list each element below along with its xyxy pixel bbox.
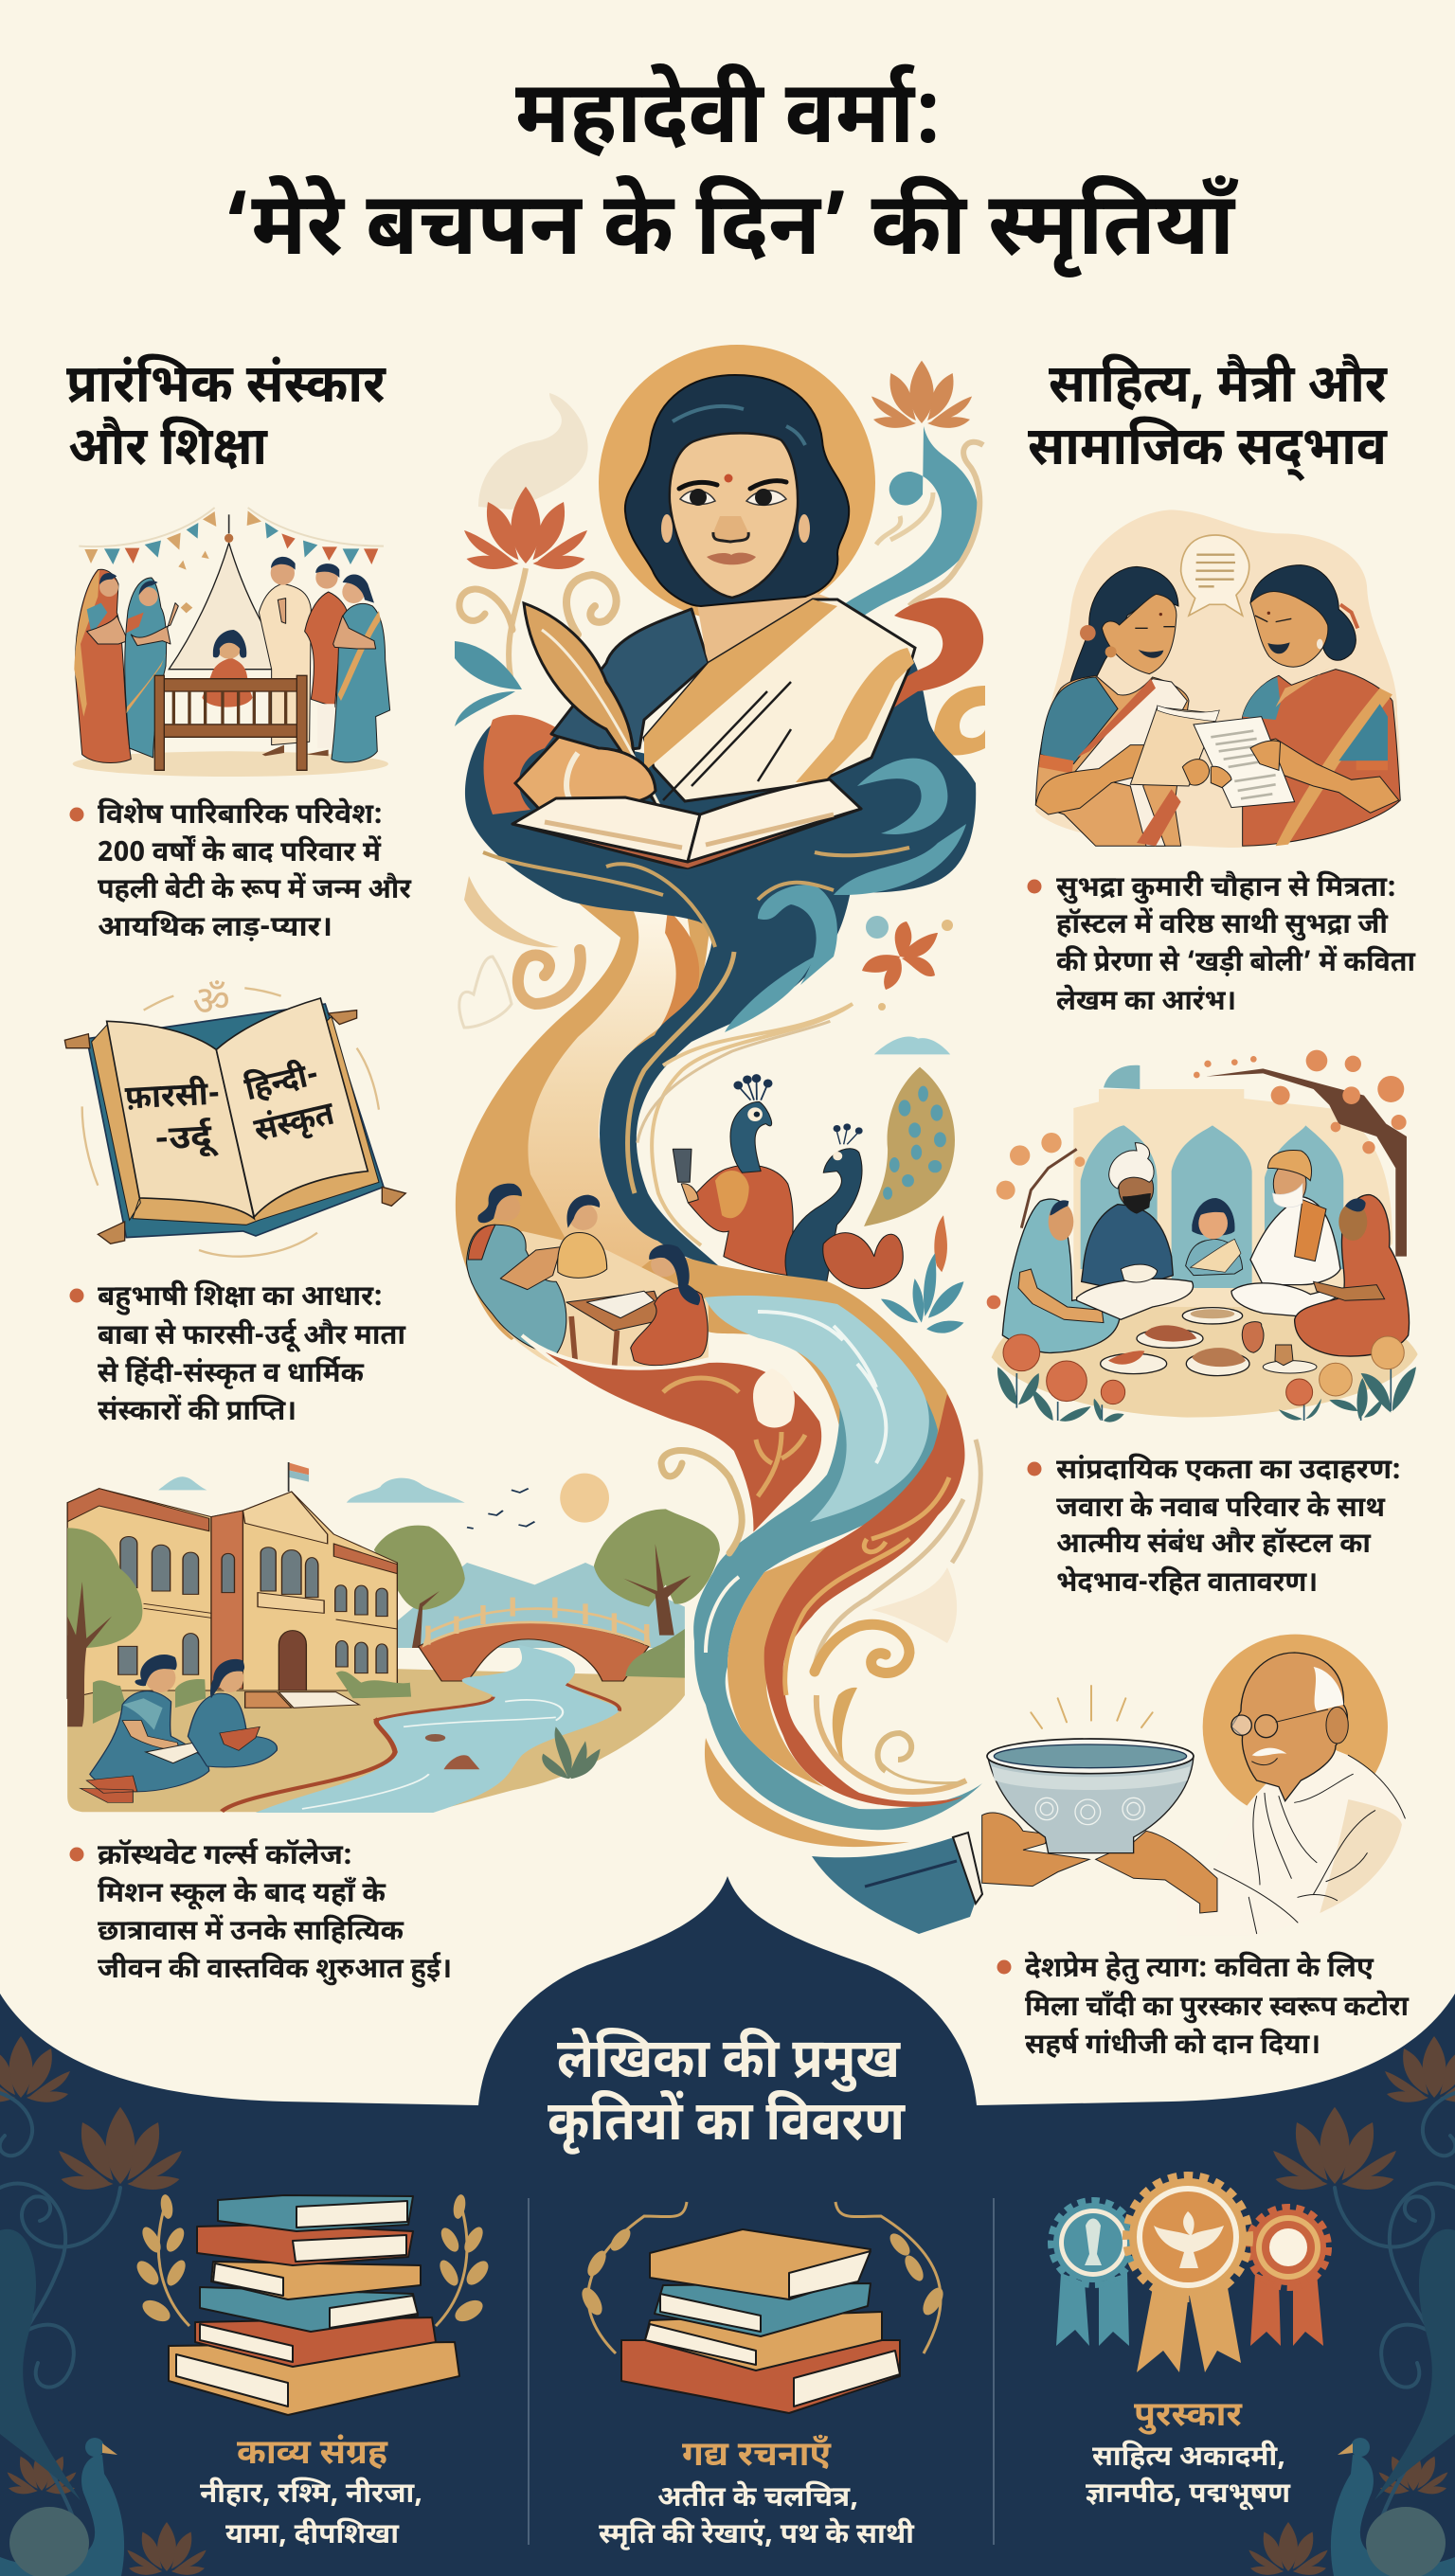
bullet: multilingual education: बाबा से फारसी-उर्दू और माता xyxy=(98,1317,406,1356)
reading girl 1 xyxy=(81,1655,209,1802)
icon: gold medal xyxy=(1129,2178,1247,2372)
feather xyxy=(524,603,664,814)
ears xyxy=(661,514,673,543)
teal accents in swirl xyxy=(834,759,966,895)
column text: नीहार, रश्मि, नीरजा, xyxy=(200,2477,422,2514)
writing arm and hand xyxy=(515,737,656,810)
document xyxy=(1194,717,1295,808)
facial features xyxy=(679,474,786,564)
icon: laurel left and right xyxy=(133,2193,493,2326)
gandhi halo xyxy=(1203,1635,1388,1819)
bushes xyxy=(93,1671,411,1724)
girls reading in ribbon xyxy=(466,1184,709,1377)
heading: literature, friendship and harmony xyxy=(1028,353,1388,486)
outer tan strokes xyxy=(815,1440,980,1667)
heading: literature, friendship and harmony: सामाजिक सद्‌भाव xyxy=(1028,417,1388,486)
faded white lotus xyxy=(459,957,512,1028)
sky elements xyxy=(158,1474,609,1529)
bowl xyxy=(988,1757,1194,1853)
om and arcs xyxy=(82,978,379,1257)
book text: -उर्दू xyxy=(153,1116,220,1164)
column text: स्मृति की रेखाएं, पथ के साथी xyxy=(599,2516,915,2555)
light blue river xyxy=(705,1296,929,1522)
left page xyxy=(107,1021,254,1219)
bullet: Crosthwaite college xyxy=(70,1837,452,1990)
bullet: patriotic sacrifice: मिला चाँदी का पुरस्कार स्वरूप कटोरा xyxy=(1025,1989,1410,2028)
bullet: friendship with Subhadra: हॉस्टल में वरिष्ठ साथी सुभद्रा जी xyxy=(1056,907,1389,945)
central illustration: flowing ribbon and portrait xyxy=(455,345,985,1847)
navy swirl mass xyxy=(465,652,976,1266)
illustration: two friends laughing xyxy=(1035,510,1400,848)
white lotus on rust ribbon xyxy=(753,1368,795,1428)
navy bottom section xyxy=(0,1876,1455,2576)
bullet: communal harmony: भेदभाव-रहित वातावरण। xyxy=(1056,1565,1318,1603)
ground xyxy=(73,751,388,777)
bullet: Crosthwaite college: मिशन स्कूल के बाद यहाँ के xyxy=(98,1875,386,1914)
bullet: communal harmony: जवारा के नवाब परिवार के साथ xyxy=(1056,1490,1386,1529)
column heading: काव्य संग्रह xyxy=(237,2433,388,2478)
beige blob xyxy=(1035,510,1400,848)
panel: prose works xyxy=(578,2202,947,2555)
title xyxy=(223,63,1239,290)
illustration: Gandhi receiving silver bowl xyxy=(812,1635,1405,1935)
ear xyxy=(1326,1707,1348,1744)
tan ribbon lower xyxy=(728,1547,827,1787)
column text: अतीत के चलचित्र, xyxy=(657,2479,858,2518)
left friend face xyxy=(1102,594,1177,674)
bullet: communal harmony: सांप्रदायिक एकता का उदाहरण: xyxy=(1056,1453,1401,1491)
decorative dots xyxy=(866,916,953,1011)
flowers right xyxy=(1279,1336,1416,1421)
bullet: friendship with Subhadra: लेखम का आरंभ। xyxy=(1056,983,1236,1022)
column text xyxy=(599,2479,915,2555)
column dividers xyxy=(529,2198,994,2545)
lower tan band xyxy=(568,1250,963,1449)
heading: early rites and education xyxy=(66,354,386,486)
bullet: patriotic sacrifice: देशप्रेम हेतु त्याग: कविता के लिए xyxy=(1025,1950,1374,1989)
decoration: left lotus and peacock xyxy=(0,2036,207,2576)
tan flowing ribbon xyxy=(456,895,710,1340)
woman 3 xyxy=(332,603,390,762)
lotus right xyxy=(871,361,972,428)
shawl xyxy=(1177,1749,1405,1935)
bullet: Crosthwaite college: जीवन की वास्तविक शुरुआत हुई। xyxy=(98,1952,452,1990)
hands on papers xyxy=(1182,760,1231,788)
bullet: Crosthwaite college: क्रॉस्थवेट गर्ल्स कॉलेज: xyxy=(98,1837,352,1876)
bullet: communal harmony xyxy=(1027,1453,1401,1603)
icon: stack of four books xyxy=(621,2229,900,2413)
bridge xyxy=(419,1598,649,1681)
left friend body xyxy=(1035,675,1189,846)
bullet: family environment xyxy=(70,796,412,948)
icon: stack of six books xyxy=(169,2195,459,2415)
trees xyxy=(374,1509,720,1648)
pale streaks on river xyxy=(758,1312,886,1463)
woman teal xyxy=(1002,1199,1120,1352)
bullet: friendship with Subhadra xyxy=(1027,869,1416,1022)
bunting xyxy=(79,508,384,564)
book text: फ़ारसी- xyxy=(124,1073,221,1123)
face xyxy=(670,433,798,598)
right friend body xyxy=(1243,670,1400,846)
column text: ज्ञानपीठ, पद्मभूषण xyxy=(1086,2477,1291,2514)
illustration: Crosthwaite college and river xyxy=(67,1462,720,1813)
bullet: family environment: आयथिक लाड़-प्यार। xyxy=(98,910,332,948)
faint tan leaves under swirl xyxy=(464,876,559,947)
old man in white xyxy=(1250,1196,1340,1285)
courtyard ground xyxy=(992,1300,1418,1418)
column heading: पुरस्कार xyxy=(1134,2395,1243,2440)
peacock scene xyxy=(638,1021,963,1333)
bullet: patriotic sacrifice xyxy=(997,1950,1410,2066)
tan scroll ornaments xyxy=(815,1624,909,1673)
tan accents on rust xyxy=(785,1477,949,1695)
decoration: right lotus and peacock xyxy=(1248,2036,1455,2576)
bullet: friendship with Subhadra: की प्रेरणा से ‘खड़ी बोली’ में कविता xyxy=(1056,944,1416,983)
illustration: family around crib xyxy=(73,508,390,777)
woman rust xyxy=(1295,1195,1409,1356)
open book xyxy=(512,779,861,876)
om and arcs: ॐ xyxy=(192,978,230,1032)
bullet: multilingual education: से हिंदी-संस्कृत व धार्मिक xyxy=(98,1355,365,1394)
teal river ribbon xyxy=(693,1373,982,1830)
plant xyxy=(542,1726,601,1779)
right friend hair xyxy=(1250,565,1356,660)
bullet: communal harmony: आत्मीय संबंध और हॉस्टल का xyxy=(1056,1527,1372,1565)
halo xyxy=(599,345,875,621)
man in navy xyxy=(1082,1205,1173,1288)
heading: author's major works: कृतियों का विवरण xyxy=(548,2090,906,2162)
hands xyxy=(982,1813,1089,1887)
bullet: patriotic sacrifice: सहर्ष गांधीजी को दान दिया। xyxy=(1025,2028,1320,2066)
mountains xyxy=(395,1563,685,1648)
canopy xyxy=(169,543,291,670)
panel: poetry collections xyxy=(133,2193,493,2555)
men xyxy=(259,584,311,745)
title: महादेवी वर्मा: xyxy=(515,63,942,178)
right page xyxy=(216,998,368,1217)
roller ends xyxy=(64,1011,405,1243)
column text: यामा, दीपशिखा xyxy=(225,2517,400,2555)
lotus left xyxy=(464,487,587,569)
tree left xyxy=(997,1133,1085,1228)
right friend arm xyxy=(1250,739,1399,813)
bullet: multilingual education: बहुभाषी शिक्षा का आधार: xyxy=(98,1279,383,1317)
left tree xyxy=(67,1528,142,1726)
rays xyxy=(1031,1686,1153,1728)
orange edge of ribbon xyxy=(654,909,699,1037)
bullet: Crosthwaite college: छात्रावास में उनके साहित्यिक xyxy=(98,1913,404,1952)
bullet: friendship with Subhadra: सुभद्रा कुमारी चौहान से मित्रता: xyxy=(1056,869,1396,908)
bullet: family environment: 200 वर्षों के बाद परिवार में xyxy=(98,834,382,873)
heading: early rites and education: और शिक्षा xyxy=(68,417,268,486)
lower tan under-ribbon xyxy=(705,1738,909,1847)
illustration: open book scroll xyxy=(64,978,405,1257)
heading: author's major works xyxy=(548,2028,906,2162)
icon: rust medal xyxy=(1250,2209,1326,2346)
icon: laurel xyxy=(578,2202,947,2353)
rust ribbon lower xyxy=(764,1394,964,1807)
column text xyxy=(1086,2440,1291,2514)
arches xyxy=(1081,1125,1343,1288)
palace wall xyxy=(1073,1089,1392,1307)
river xyxy=(222,1645,620,1813)
woman 2 xyxy=(125,578,167,758)
folder xyxy=(1130,707,1217,786)
teal sleeve xyxy=(812,1837,976,1934)
faint flower xyxy=(871,1567,957,1643)
sari xyxy=(644,599,915,801)
left friend hair xyxy=(1070,566,1178,682)
flowers left xyxy=(987,1296,1125,1422)
tan spiral near ribbon xyxy=(518,950,581,1004)
right friend face xyxy=(1250,592,1328,667)
child xyxy=(1186,1239,1243,1276)
column text xyxy=(200,2477,422,2555)
flag xyxy=(289,1462,309,1492)
bullet: multilingual education xyxy=(70,1279,406,1432)
icon: teal medal xyxy=(1053,2203,1133,2346)
hair xyxy=(625,375,849,606)
book text: संस्कृत xyxy=(251,1095,339,1155)
heading: author's major works: लेखिका की प्रमुख xyxy=(557,2028,901,2100)
right bushes xyxy=(625,1629,685,1678)
building xyxy=(67,1489,397,1708)
heading: early rites and education: प्रारंभिक संस्कार xyxy=(66,354,386,423)
glasses xyxy=(1276,1709,1328,1722)
tree right xyxy=(1194,1050,1407,1257)
rust ribbon upper xyxy=(522,1335,823,1537)
background ornaments xyxy=(455,393,985,756)
title: ‘मेरे बचपन के दिन’ की स्मृतियाँ xyxy=(223,175,1239,290)
bullet: family environment: पहली बेटी के रूप में जन्म और xyxy=(98,871,412,910)
left friend arm xyxy=(1035,745,1165,814)
bullet: family environment: विशेष पारिबारिक परिवेश: xyxy=(98,796,383,835)
crib xyxy=(154,675,307,770)
panel: awards xyxy=(1053,2178,1326,2514)
baby xyxy=(202,658,253,707)
book text xyxy=(124,1054,339,1164)
cream peach centre of ribbon xyxy=(528,909,720,1279)
reading girl 2 xyxy=(188,1659,277,1767)
page block xyxy=(92,1016,379,1225)
woman 1 xyxy=(75,569,131,762)
cover xyxy=(87,1004,384,1238)
heading: literature, friendship and harmony: साहित्य, मैत्री और xyxy=(1049,353,1388,423)
ground xyxy=(67,1660,685,1812)
head xyxy=(1231,1653,1347,1801)
swirl near college xyxy=(661,1450,742,1553)
rust curl beside shoulder xyxy=(857,598,983,743)
moustache and mouth xyxy=(1252,1748,1286,1756)
dishes xyxy=(1101,1308,1317,1376)
orange leaf flower xyxy=(862,921,938,990)
book text: हिन्दी- xyxy=(241,1054,323,1114)
column text: साहित्य अकादमी, xyxy=(1092,2440,1285,2478)
illustration: shared meal with the Nawab family xyxy=(987,1050,1418,1422)
bullet: multilingual education: संस्कारों की प्राप्ति। xyxy=(98,1394,296,1432)
neck and blouse xyxy=(551,609,709,753)
speech bubble xyxy=(1181,535,1249,616)
column heading: गद्य रचनाएँ xyxy=(682,2433,832,2479)
